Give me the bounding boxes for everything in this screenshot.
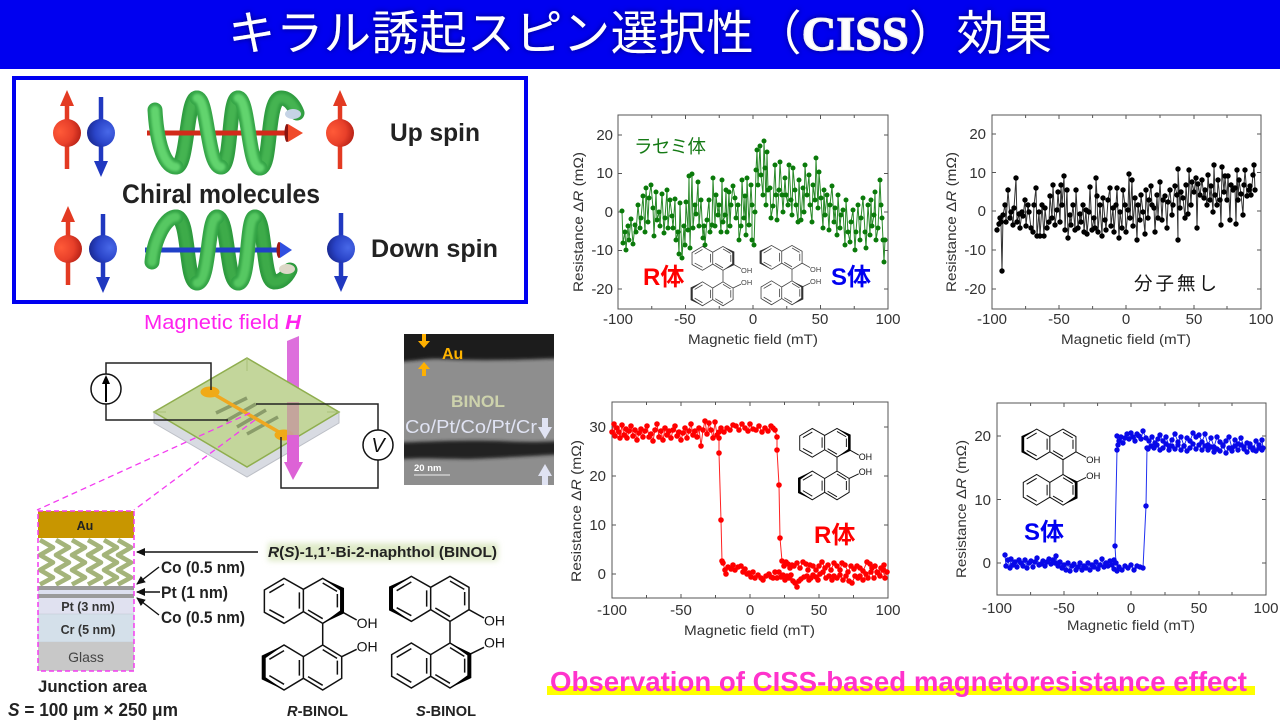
- axis tick labels: 50: [811, 602, 827, 619]
- icon: incoming down spin top: [87, 97, 115, 177]
- axis tick labels: 10: [589, 517, 606, 534]
- title banner: [0, 0, 1280, 69]
- molecule: S-BINOL: OH: [484, 612, 505, 628]
- dashed zoom lines: [37, 413, 255, 510]
- axis tick labels: 0: [605, 204, 613, 221]
- chart: S form hysteresis: [953, 403, 1279, 633]
- layer labels: [61, 519, 115, 665]
- axis titles: Magnetic field (mT): [1061, 331, 1191, 347]
- axis tick labels: 20: [974, 428, 991, 445]
- layer arrows: [137, 552, 258, 615]
- molecule: R inset: [798, 428, 872, 500]
- wires and voltmeter: V: [371, 435, 386, 457]
- axis tick labels: 0: [749, 311, 757, 328]
- label: R-BINOL: R-BINOL: [287, 703, 348, 720]
- molecule: S mini: [760, 245, 821, 305]
- molecule: R mini: OH: [741, 266, 752, 275]
- label: magnetic field H: Magnetic field H: [144, 312, 302, 334]
- arrow: magnetic field lower part: [284, 402, 303, 480]
- icon: incoming up spin bottom: [54, 206, 82, 285]
- wires and voltmeter: [256, 404, 393, 488]
- icon: helix with blue arrow: [145, 217, 295, 283]
- icon: helix with red arrow: [147, 98, 303, 168]
- axis tick labels: 0: [1122, 311, 1130, 328]
- TEM image: [404, 334, 554, 485]
- molecule: S-BINOL: [389, 576, 505, 688]
- chart: racemic: Resistance ΔR (mΩ): [570, 152, 586, 292]
- axis tick labels: 100: [1253, 600, 1279, 617]
- layer labels: Cr (5 nm): [61, 623, 115, 637]
- axis tick labels: 10: [974, 492, 991, 509]
- layer stack: junction cross section: [38, 511, 134, 671]
- molecule: R-BINOL: OH: [357, 638, 378, 654]
- axis tick labels: 0: [978, 203, 986, 220]
- axis tick labels: 0: [746, 602, 754, 619]
- icon: incoming up spin top: [53, 90, 81, 169]
- axis tick labels: [964, 126, 1274, 328]
- panel: chiral molecules spin filter: [14, 78, 526, 302]
- axis tick labels: 0: [598, 566, 606, 583]
- layer thickness labels: [161, 558, 245, 627]
- chart: no molecule: Resistance ΔR (mΩ): [943, 152, 959, 292]
- arrows: Au thickness: [418, 334, 430, 376]
- arrows: metal thickness: [538, 418, 552, 485]
- layer labels: Pt (3 nm): [61, 600, 115, 614]
- data series: [997, 165, 1255, 271]
- molecule: R-BINOL: [262, 578, 378, 690]
- label: R form: R体: [643, 264, 684, 291]
- axis tick labels: -10: [591, 242, 613, 259]
- axis tick labels: 30: [589, 419, 606, 436]
- chart: racemic: [570, 115, 901, 347]
- axis tick labels: -20: [964, 281, 986, 298]
- axis tick labels: -50: [1053, 600, 1075, 617]
- axis tick labels: [591, 127, 901, 328]
- axis tick labels: 0: [983, 555, 991, 572]
- axis tick labels: 20: [969, 126, 986, 143]
- axis tick labels: 10: [969, 165, 986, 182]
- data series: [612, 421, 887, 587]
- chiral molecule layer: [40, 540, 131, 584]
- axis tick labels: -100: [977, 311, 1007, 328]
- axis tick labels: -100: [982, 600, 1012, 617]
- layer thickness labels: Co (0.5 nm): [161, 608, 245, 627]
- axis tick labels: -100: [603, 311, 633, 328]
- icon: outgoing up spin: [326, 90, 354, 169]
- axis tick labels: 100: [1248, 311, 1274, 328]
- axis tick labels: -20: [591, 281, 613, 298]
- axis titles: Magnetic field (mT): [688, 331, 818, 347]
- axis tick labels: 100: [875, 602, 901, 619]
- gold electrode line and pads: [200, 386, 294, 440]
- arrow: magnetic field upper part: [287, 336, 299, 402]
- label: up spin: Up spin: [390, 119, 480, 147]
- axis tick labels: [974, 428, 1279, 617]
- molecule: R inset: OH: [859, 452, 872, 462]
- data series: [1005, 431, 1263, 571]
- molecule: S mini: OH: [810, 277, 821, 286]
- axis tick labels: -50: [674, 311, 696, 328]
- layer labels: Glass: [68, 649, 104, 665]
- chart: R form hysteresis: [568, 402, 901, 638]
- data series: [622, 141, 885, 262]
- molecule: S mini: OH: [810, 265, 821, 274]
- axis tick labels: 50: [1191, 600, 1207, 617]
- axis tick labels: -10: [964, 242, 986, 259]
- scale bar: [414, 463, 450, 475]
- molecule: S inset: OH: [1086, 455, 1101, 466]
- axis tick labels: [589, 419, 901, 619]
- label: BINOL: BINOL: [451, 392, 505, 411]
- axis tick labels: 10: [596, 165, 613, 182]
- axis tick labels: 100: [875, 311, 901, 328]
- icon: incoming down spin bottom: [89, 214, 117, 293]
- label: R form: R体: [814, 522, 855, 549]
- chart: no molecule: [943, 115, 1274, 347]
- axis tick labels: 20: [589, 468, 606, 485]
- axis tick labels: 0: [1127, 600, 1135, 617]
- label: racemate: ラセミ体: [634, 136, 706, 157]
- layer thickness labels: Co (0.5 nm): [161, 558, 245, 577]
- chart: R form hysteresis: Resistance ΔR (mΩ): [568, 440, 584, 582]
- title text: キラル誘起スピン選択性（CISS）効果: [228, 8, 1052, 61]
- label: chiral molecules: Chiral molecules: [122, 179, 320, 209]
- molecule: S inset: OH: [1086, 471, 1101, 482]
- axis tick labels: -50: [1048, 311, 1070, 328]
- label: junction area: Junction area: [38, 677, 148, 696]
- label: no molecule: 分子無し: [1134, 273, 1217, 294]
- axis tick labels: 50: [812, 311, 828, 328]
- label: Au: Au: [442, 346, 463, 363]
- molecule: R inset: OH: [859, 467, 872, 477]
- chart: S form hysteresis: Resistance ΔR (mΩ): [953, 440, 969, 578]
- label: S form: S体: [831, 264, 871, 291]
- label: down spin: Down spin: [371, 235, 498, 263]
- layer labels: Au: [77, 519, 93, 533]
- axis tick labels: -50: [670, 602, 692, 619]
- axis titles: Magnetic field (mT): [684, 622, 815, 638]
- electrode bars: [216, 398, 278, 434]
- molecule: S-BINOL: OH: [484, 634, 505, 650]
- layer thickness labels: Pt (1 nm): [161, 583, 228, 602]
- molecule: R mini: [691, 246, 752, 306]
- label: BINOL name: R(S)-1,1’-Bi-2-naphthol (BINOL): [268, 544, 497, 561]
- molecule: S inset: [1021, 429, 1101, 505]
- label: junction size: S = 100 μm × 250 μm: [8, 700, 178, 720]
- molecule: R-BINOL: OH: [357, 615, 378, 631]
- callout: observation statement: Observation of CISS-based magnetoresistance effect: [550, 666, 1247, 697]
- label: S form: S体: [1024, 519, 1064, 546]
- molecule: R mini: OH: [741, 278, 752, 287]
- axis tick labels: -100: [597, 602, 627, 619]
- axis titles: Magnetic field (mT): [1067, 617, 1195, 633]
- axis tick labels: 50: [1186, 311, 1202, 328]
- substrate plate: [154, 358, 339, 477]
- icon: outgoing down spin: [327, 213, 355, 292]
- wires and current source: [91, 363, 228, 420]
- label: metal layers: Co/Pt/Co/Pt/Cr: [405, 417, 537, 437]
- scale bar: 20 nm: [414, 463, 441, 474]
- axis tick labels: 20: [596, 127, 613, 144]
- device schematic: [37, 336, 393, 510]
- label: S-BINOL: S-BINOL: [416, 703, 476, 720]
